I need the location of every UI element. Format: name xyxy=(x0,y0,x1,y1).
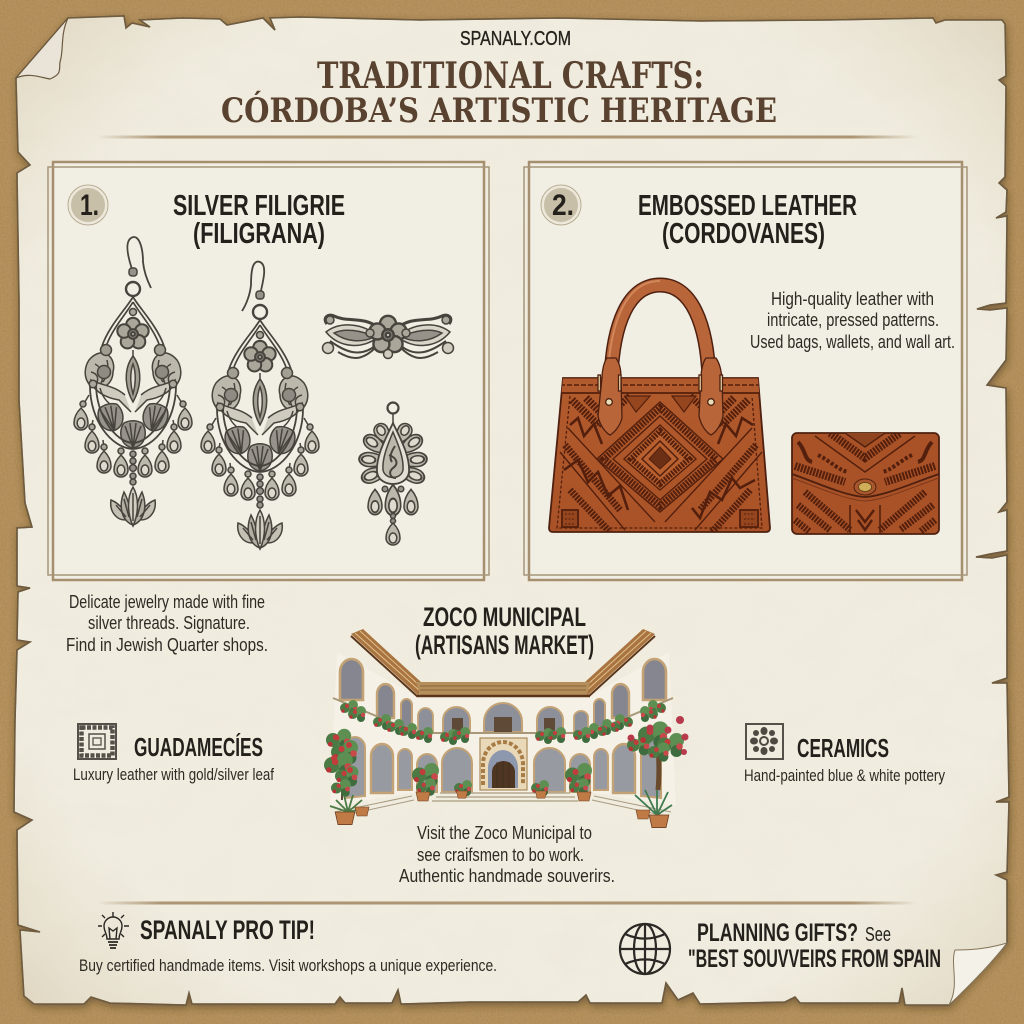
brooch xyxy=(322,315,454,358)
flower garlands xyxy=(415,727,591,745)
illustration: zoco courtyard xyxy=(324,629,688,828)
heading: pro tip: SPANALY PRO TIP! xyxy=(140,915,315,945)
pro tip xyxy=(79,912,497,975)
heading: guadamecies: GUADAMECÍES xyxy=(134,732,263,762)
description: guadamecies: Luxury leather with gold/silver leaf xyxy=(73,765,274,784)
description: filigree: Find in Jewish Quarter shops. xyxy=(66,635,268,655)
description: leather xyxy=(750,289,955,352)
leather wallet xyxy=(792,433,939,534)
description: filigree: silver threads. Signature. xyxy=(88,613,250,633)
description: zoco: see craifsmen to bo work. xyxy=(417,845,584,865)
title xyxy=(221,55,777,131)
icon: guadamecies tile xyxy=(78,724,116,759)
heading: zoco municipal: ZOCO MUNICIPAL xyxy=(423,602,586,632)
site name: SPANALY.COM xyxy=(460,28,571,50)
text: planning gifts xyxy=(688,919,941,973)
left flowering bush xyxy=(324,729,369,825)
description: zoco: Visit the Zoco Municipal to xyxy=(417,823,592,843)
panel: embossed leather xyxy=(524,162,967,580)
pendant xyxy=(359,402,427,545)
description: leather: High-quality leather with xyxy=(771,289,934,309)
icon: light bulb xyxy=(98,912,129,948)
heading: embossed leather: EMBOSSED LEATHER xyxy=(638,190,857,222)
earring middle xyxy=(201,262,319,549)
description: zoco xyxy=(399,823,615,886)
description: leather: Used bags, wallets, and wall art. xyxy=(750,332,955,352)
panel: silver filigree xyxy=(48,162,489,580)
description: leather: intricate, pressed patterns. xyxy=(767,310,939,330)
icon: globe xyxy=(620,924,670,974)
item: ceramics xyxy=(744,724,945,785)
description: zoco: Authentic handmade souverirs. xyxy=(399,866,615,886)
title: TRADITIONAL CRAFTS: xyxy=(317,55,704,97)
title: CÓRDOBA’S ARTISTIC HERITAGE xyxy=(221,90,777,131)
heading: silver filigrie xyxy=(173,190,345,250)
heading: zoco municipal: (ARTISANS MARKET) xyxy=(415,630,594,660)
heading: ceramics: CERAMICS xyxy=(797,733,889,763)
number badge 1: 1. xyxy=(80,189,99,222)
description: filigree: Delicate jewelry made with fine xyxy=(69,592,265,612)
leather handbag xyxy=(549,281,770,532)
planning gifts callout xyxy=(620,919,941,974)
heading: embossed leather: (CORDOVANES) xyxy=(662,218,825,250)
icon: ceramics tile xyxy=(746,724,783,759)
doorway xyxy=(480,738,527,790)
text: planning gifts: PLANNING GIFTS? xyxy=(697,919,858,947)
heading: silver filigrie: (FILIGRANA) xyxy=(193,218,325,250)
number badge 2: 2. xyxy=(552,189,574,222)
back wall xyxy=(416,682,590,793)
heading: zoco municipal xyxy=(415,602,594,660)
item: guadamecies xyxy=(73,724,274,784)
description: ceramics: Hand-painted blue & white pottery xyxy=(744,766,945,785)
handle xyxy=(608,281,709,378)
description: filigree xyxy=(66,592,268,655)
number badge 1 xyxy=(68,185,108,225)
right flowering tree xyxy=(627,716,688,828)
earring left xyxy=(74,237,192,526)
potted plants xyxy=(412,763,592,801)
description: pro tip: Buy certified handmade items. Visit workshops a unique experience. xyxy=(79,956,497,975)
number badge 2 xyxy=(541,185,581,225)
heading: silver filigrie: SILVER FILIGRIE xyxy=(173,190,345,222)
steps xyxy=(432,793,578,801)
heading: embossed leather xyxy=(638,190,857,250)
handle tabs xyxy=(598,358,723,435)
text: planning gifts: See xyxy=(865,924,891,946)
